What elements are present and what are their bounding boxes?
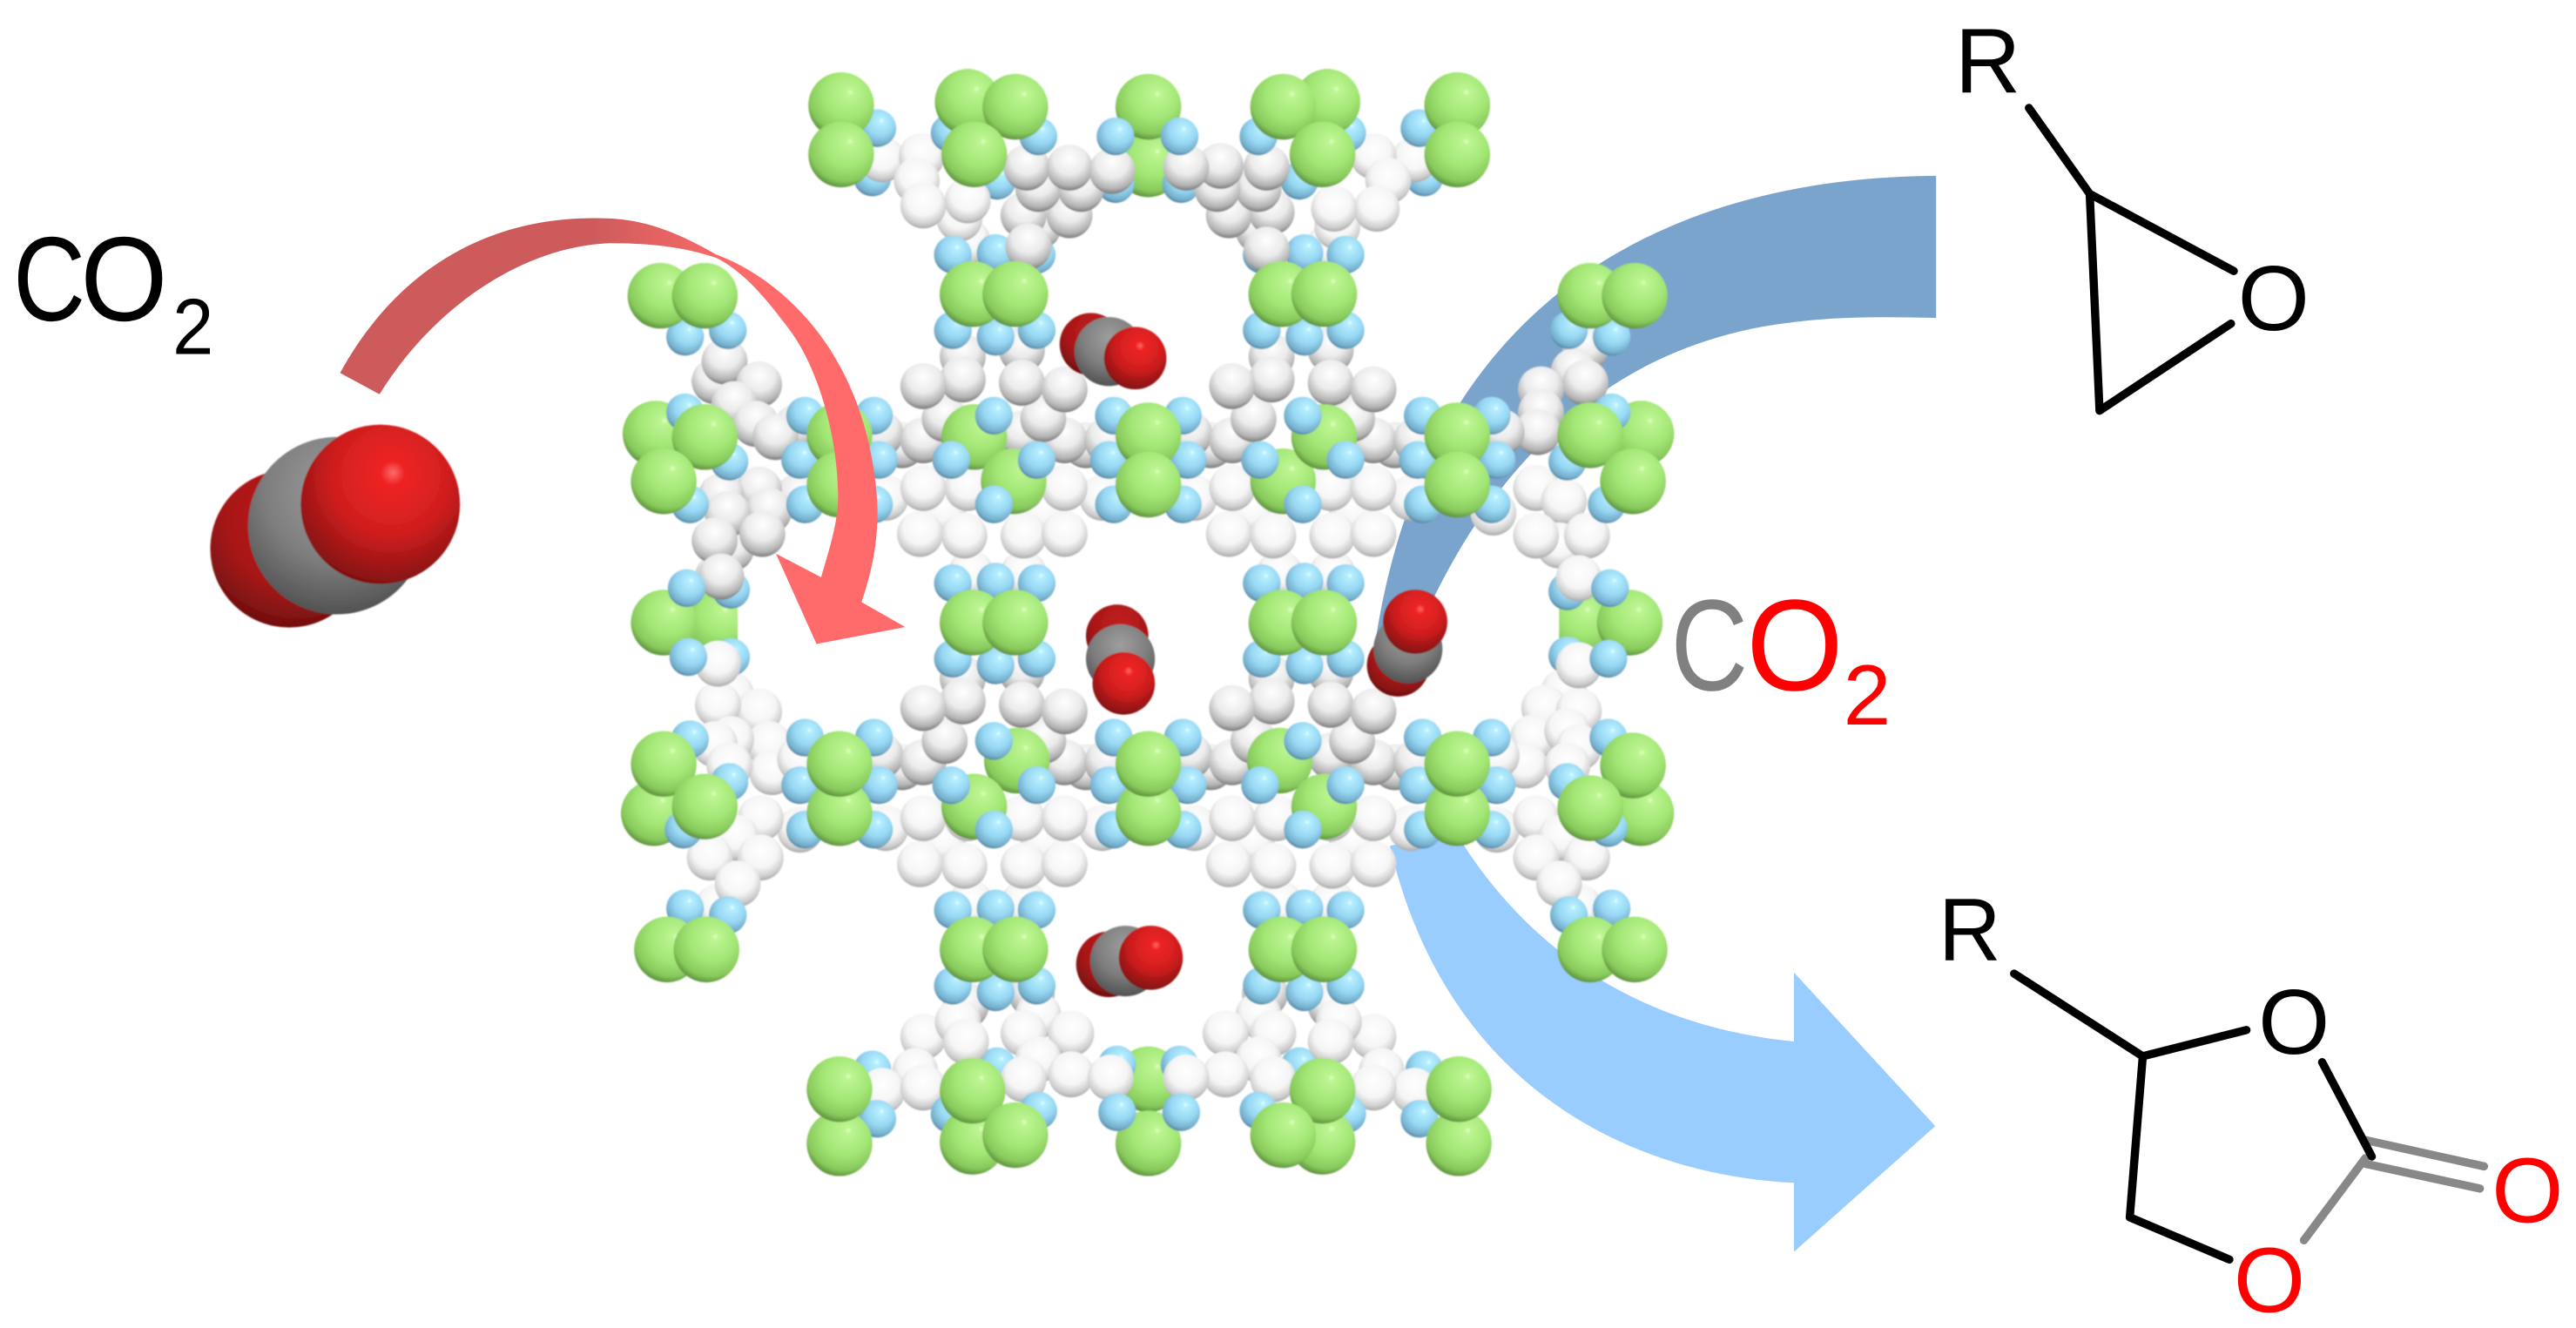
arrow: cyclic carbonate leaving (light blue) xyxy=(1390,830,1935,1251)
linker carbon and hydrogen atoms xyxy=(687,133,1610,1114)
black bonds xyxy=(2014,974,2371,1259)
chemical structure: epoxide xyxy=(1955,10,2310,411)
epoxide bonds xyxy=(2029,108,2234,411)
R group label: R xyxy=(1955,10,2020,113)
CO2 molecule in lower pore xyxy=(1076,926,1183,997)
label: CO2 (grey and red): O xyxy=(1746,572,1844,718)
ring oxygen, black: O xyxy=(2258,971,2330,1074)
arrow: CO2 entering framework (red) xyxy=(341,218,905,644)
label: CO2 (black) xyxy=(13,212,213,372)
arrow: epoxide entering (steel blue) xyxy=(1375,176,1936,665)
recessed chlorine atoms xyxy=(621,74,1674,1176)
label: CO2 (grey and red) xyxy=(1671,572,1891,743)
label: CO2 (black): C xyxy=(13,212,85,347)
front chlorine clusters xyxy=(628,69,1668,1176)
label: CO2 (black): O xyxy=(80,212,167,347)
carbonyl oxygen, red: O xyxy=(2492,1140,2563,1243)
side node at right of middle row xyxy=(1546,556,1662,688)
CO2 molecule in middle pore xyxy=(1086,604,1155,715)
CO2 molecule in upper pore xyxy=(1060,313,1166,389)
chemical structure: cyclic carbonate xyxy=(1939,880,2563,1328)
rear atoms behind the outer linkers xyxy=(853,131,1443,1112)
label: CO2 (black): 2 xyxy=(172,284,213,372)
nitrogen atoms at the framework rows xyxy=(664,109,1630,1137)
CO2 molecule at catalytic site xyxy=(1367,590,1447,697)
grey bonds to red oxygens xyxy=(2304,1140,2484,1240)
side node at left of middle row xyxy=(631,554,750,687)
oxygen label: O xyxy=(2238,247,2310,350)
label: CO2 (grey and red): 2 xyxy=(1844,647,1891,743)
label: CO2 (grey and red): C xyxy=(1671,572,1748,718)
R group label: R xyxy=(1939,880,2001,980)
free CO2 molecule xyxy=(210,425,460,628)
MOF framework space-filling model xyxy=(621,69,1674,1176)
